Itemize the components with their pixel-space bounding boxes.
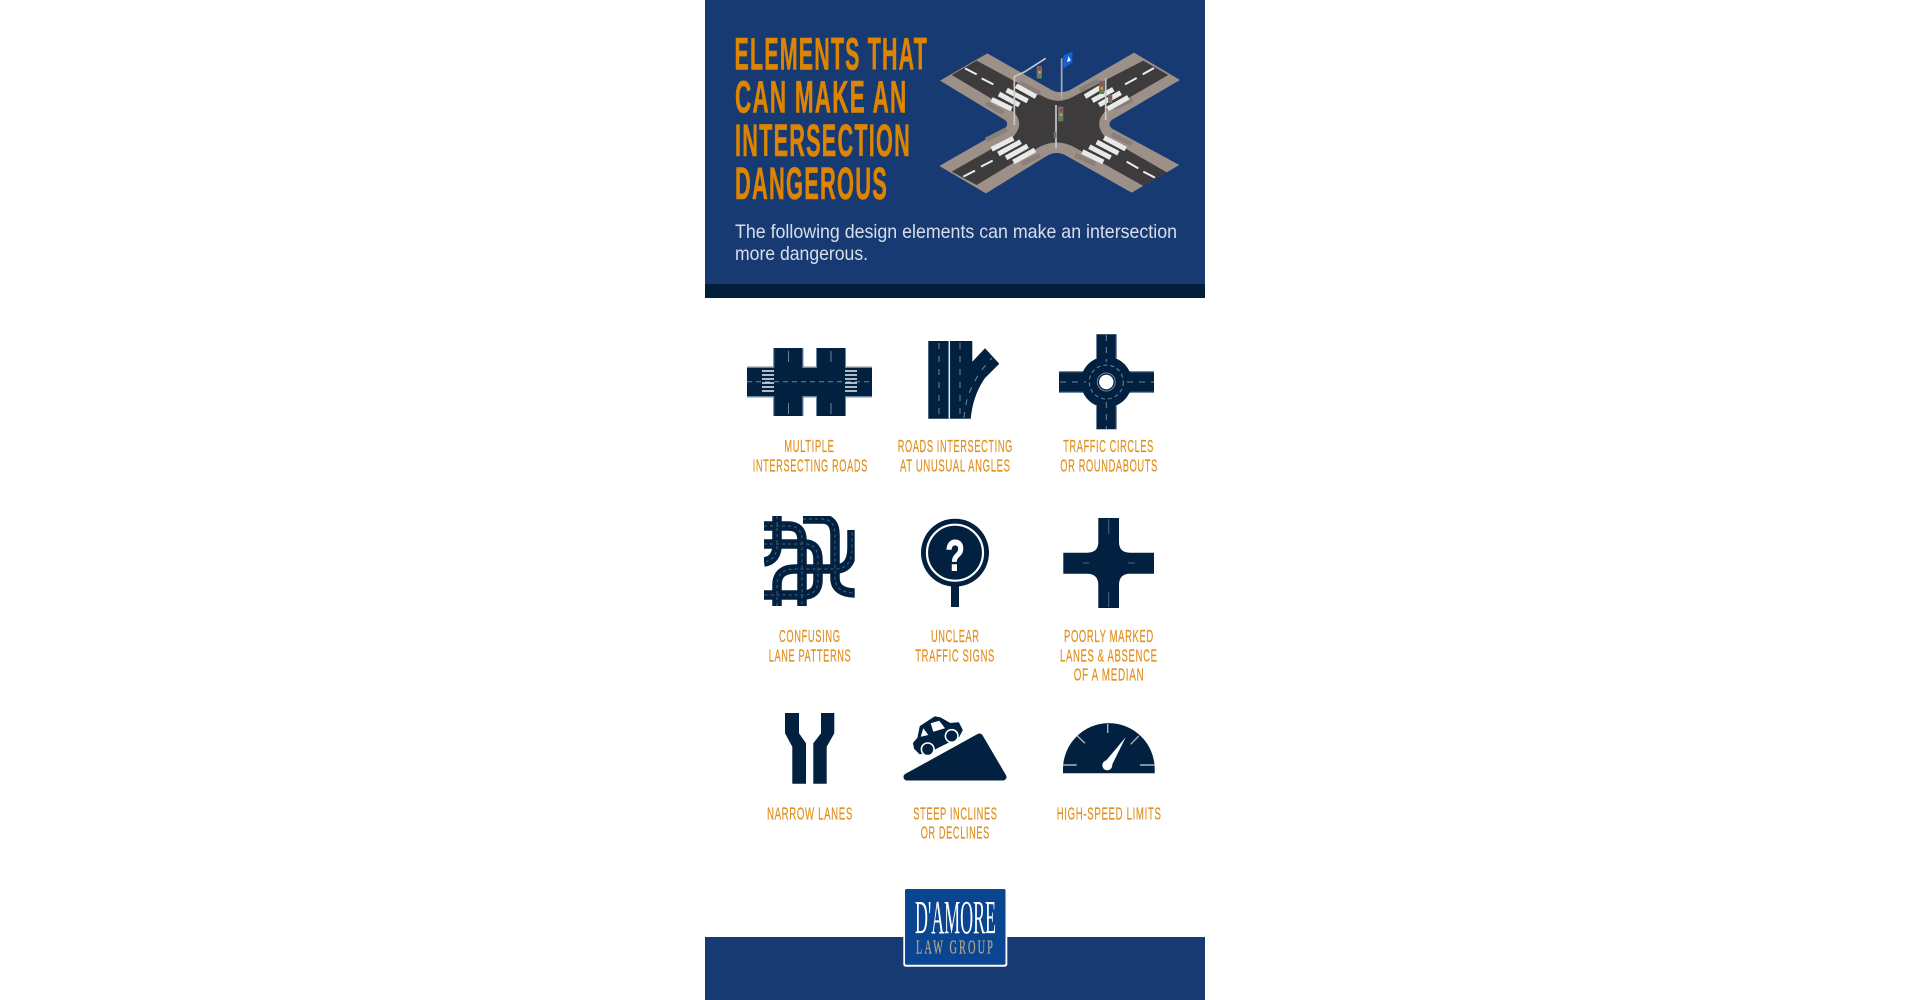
label <box>753 436 868 476</box>
label: MULTIPLE <box>784 436 834 456</box>
icon: speedometer <box>1063 723 1155 773</box>
subtitle text: more dangerous. <box>735 243 868 265</box>
icon: tangled lanes <box>764 516 856 606</box>
panel: high-speed limits <box>1057 723 1162 823</box>
icon: question sign <box>921 519 989 607</box>
panel: header <box>705 0 1205 298</box>
title: DANGEROUS <box>735 158 888 209</box>
icon: narrowing road <box>785 713 834 784</box>
title: INTERSECTION <box>735 115 911 166</box>
panel: confusing lane patterns <box>764 516 856 665</box>
panel: footer: D'AMORE <box>915 891 996 944</box>
title: CAN MAKE AN <box>735 72 908 123</box>
subtitle text <box>735 221 1177 265</box>
label <box>915 626 995 665</box>
label <box>913 803 998 842</box>
label: CONFUSING <box>779 626 841 646</box>
panel: footer <box>705 889 1205 1000</box>
subtitle text: The following design elements can make an intersection <box>735 221 1177 243</box>
logo <box>903 889 1007 967</box>
label: STEEP INCLINES <box>913 803 998 823</box>
label: LANES & ABSENCE <box>1060 645 1158 665</box>
label: OR ROUNDABOUTS <box>1060 456 1158 476</box>
panel: narrow lanes <box>767 713 853 823</box>
label <box>1060 626 1158 684</box>
label: OR DECLINES <box>921 822 990 842</box>
panel: multiple intersecting roads <box>747 348 872 476</box>
label: LANE PATTERNS <box>769 645 851 665</box>
label <box>769 626 851 665</box>
label: NARROW LANES <box>767 803 853 823</box>
label: POORLY MARKED <box>1064 626 1154 646</box>
label: AT UNUSUAL ANGLES <box>900 456 1011 476</box>
panel: poorly marked lanes <box>1060 518 1158 684</box>
label: UNCLEAR <box>931 626 980 646</box>
label: OF A MEDIAN <box>1074 664 1144 684</box>
panel: traffic circles <box>1059 334 1158 476</box>
panel: roads intersecting at unusual angles <box>898 341 1013 476</box>
icon: multiple intersecting roads <box>747 348 872 416</box>
label: TRAFFIC SIGNS <box>915 645 995 665</box>
title <box>734 28 928 209</box>
icon: roundabout <box>1059 334 1154 429</box>
icon: car on hill <box>907 717 1003 777</box>
panel: header: ELEMENTS THAT <box>734 28 928 80</box>
label: HIGH-SPEED LIMITS <box>1057 803 1162 823</box>
logo: LAW GROUP <box>916 936 995 958</box>
panel: unclear traffic signs <box>915 519 995 665</box>
illustration: isometric intersection <box>939 52 1180 193</box>
icon: angled road <box>928 341 999 419</box>
label <box>1060 436 1158 476</box>
label <box>898 436 1013 476</box>
label: TRAFFIC CIRCLES <box>1063 436 1154 456</box>
icon: plain cross <box>1063 518 1154 608</box>
label: INTERSECTING ROADS <box>753 456 868 476</box>
icon: question sign: ? <box>945 531 965 581</box>
label: ROADS INTERSECTING <box>898 436 1013 456</box>
panel: steep inclines <box>907 717 1003 842</box>
